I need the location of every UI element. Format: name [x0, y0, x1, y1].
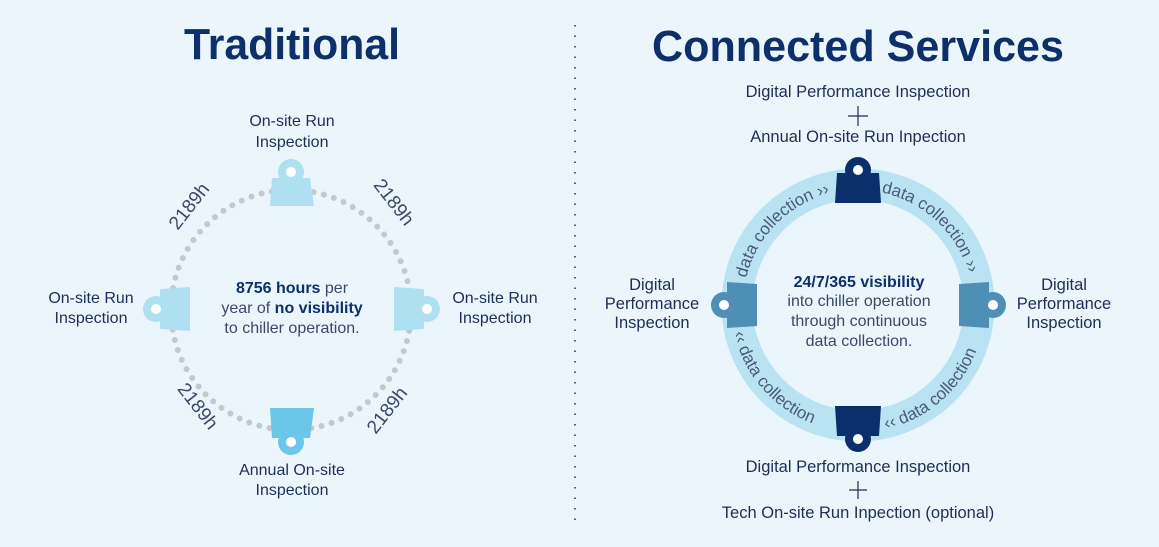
- panel: traditional cycle: [48, 113, 538, 499]
- icon: top node: [270, 159, 314, 206]
- panel: connected services cycle: [605, 83, 1111, 522]
- hour labels: 2189h: [369, 175, 418, 230]
- hour labels: 2189h: [173, 379, 222, 434]
- hour labels: 2189h: [363, 383, 412, 438]
- ring labels: data collection: data collection ››: [882, 182, 975, 272]
- node labels: Annual On-site: [239, 462, 345, 479]
- node labels: [605, 83, 1111, 522]
- icon: top node: [835, 157, 881, 203]
- node labels: Annual On-site Run Inpection: [750, 128, 966, 146]
- center text: year of no visibility: [221, 300, 363, 317]
- node labels: Inspection: [55, 310, 127, 327]
- node labels: Inspection: [1026, 314, 1102, 332]
- center text: to chiller operation.: [224, 320, 360, 337]
- node labels: On-site Run: [48, 290, 134, 307]
- ring labels: data collection: ‹‹ data collection: [885, 348, 976, 427]
- icon: left node: [143, 287, 190, 331]
- node labels: Inspection: [256, 482, 328, 499]
- node labels: Inspection: [256, 134, 328, 151]
- icon: right node: [959, 282, 1006, 328]
- icon: bottom node: [270, 408, 314, 455]
- ring labels: data collection: data collection ››: [736, 186, 828, 277]
- node labels: Inspection: [459, 310, 531, 327]
- node labels: Digital: [1041, 276, 1087, 294]
- center text: [787, 274, 931, 350]
- ring labels: data collection: [736, 182, 976, 427]
- node labels: Tech On-site Run Inpection (optional): [722, 504, 994, 522]
- node labels: Digital Performance Inspection: [746, 83, 970, 101]
- node labels: On-site Run: [452, 290, 538, 307]
- hour labels: 2189h: [165, 179, 214, 234]
- center text: into chiller operation: [787, 293, 931, 310]
- node labels: Digital: [629, 276, 675, 294]
- icon: left node: [711, 282, 757, 328]
- node labels: On-site Run: [249, 113, 335, 130]
- center text: [221, 280, 363, 337]
- title: Traditional: Traditional: [184, 20, 400, 69]
- title: Connected Services: Connected Services: [652, 22, 1064, 71]
- node labels: Digital Performance Inspection: [746, 458, 970, 476]
- ring labels: data collection: ‹‹ data collection: [736, 332, 814, 424]
- node labels: [48, 113, 538, 499]
- icon: right node: [394, 287, 440, 331]
- center text: 24/7/365 visibility: [794, 274, 924, 291]
- hour labels: [165, 175, 418, 438]
- icon: bottom node: [835, 406, 881, 452]
- node labels: Inspection: [614, 314, 690, 332]
- node labels: Performance: [605, 295, 699, 313]
- node labels: Performance: [1017, 295, 1111, 313]
- center text: 8756 hours per: [236, 280, 349, 297]
- center text: through continuous: [791, 313, 927, 330]
- icon: plus signs: [848, 106, 868, 499]
- center text: data collection.: [806, 333, 912, 350]
